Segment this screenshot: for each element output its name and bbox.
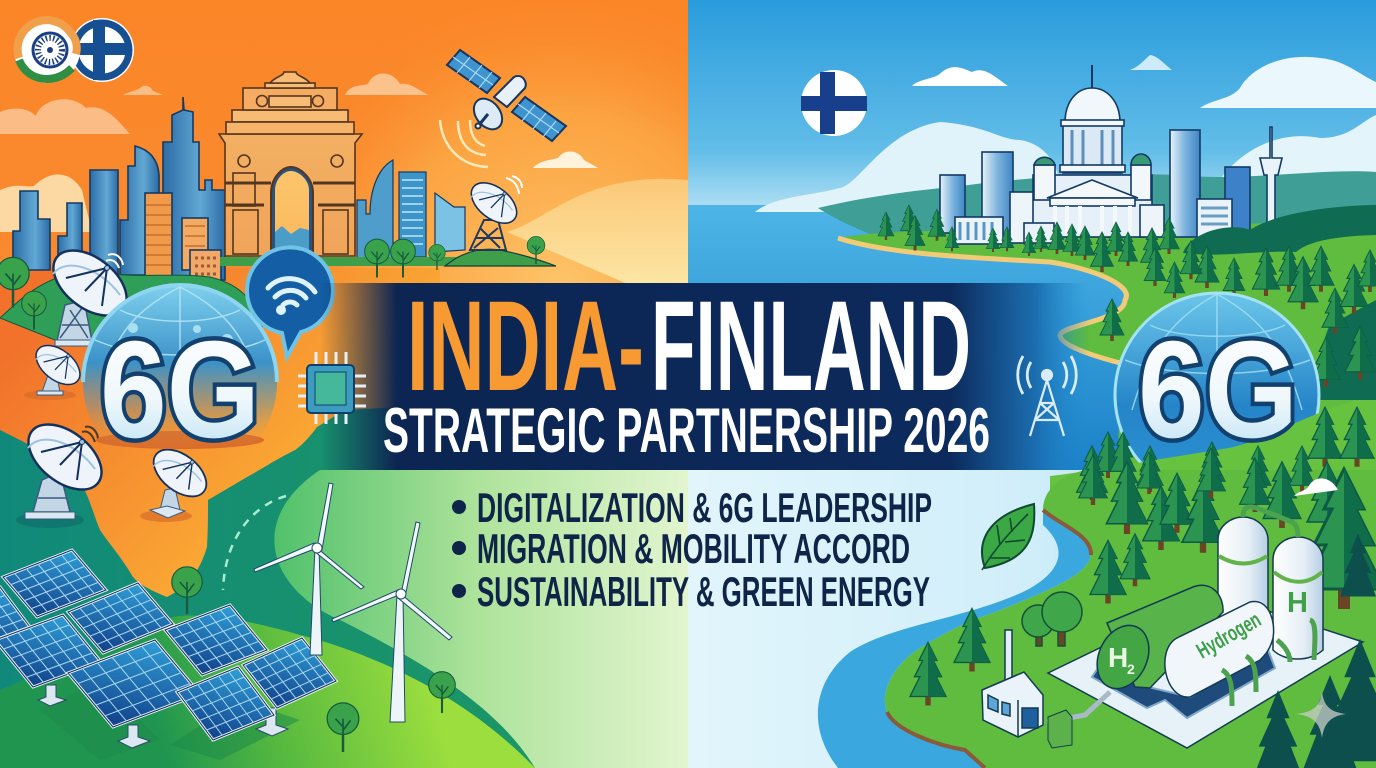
trees: India left round trees bbox=[0, 257, 46, 330]
icon: satellite dishes on map bbox=[16, 237, 215, 528]
bullet list: partnership pillars: DIGITALIZATION & 6G LEADERSHIP bbox=[477, 484, 932, 531]
west coast dish bbox=[33, 472, 70, 512]
bullet list: partnership pillars: MIGRATION & MOBILITY ACCORD bbox=[477, 525, 910, 572]
hill: green hill below skyline bbox=[0, 270, 262, 345]
skyline: India city buildings right bbox=[357, 160, 465, 258]
globe: India 6G bbox=[83, 285, 277, 479]
south dish bbox=[160, 488, 180, 510]
logo: India and Finland interlocked rings bbox=[14, 17, 134, 83]
panel: Finland sky and sea background bbox=[688, 0, 1376, 475]
India ring bbox=[14, 17, 80, 83]
label: 6G left: 6G bbox=[100, 313, 260, 467]
icon: microchip bbox=[298, 352, 366, 424]
forest: lower trees bbox=[910, 407, 1376, 706]
panel legs bbox=[38, 685, 288, 748]
icon: signal waves from satellite bbox=[440, 120, 488, 167]
white horizontal tank bbox=[1165, 602, 1274, 697]
vertical tank one bbox=[1218, 517, 1268, 630]
steam cloud bbox=[1294, 478, 1338, 496]
vertical tank two bbox=[1273, 537, 1323, 659]
shoreline: sand strip bbox=[838, 238, 1126, 363]
icon: green leaf bbox=[982, 504, 1034, 570]
white horizontal tank: Hydrogen bbox=[1192, 607, 1265, 663]
skyline: India city buildings left bbox=[13, 97, 225, 283]
small dish bbox=[42, 372, 60, 392]
platform bbox=[1048, 593, 1363, 748]
land: Finland southern forest bbox=[885, 470, 1376, 768]
icon: Wi-Fi speech bubble bbox=[247, 247, 333, 357]
banner: central title band bbox=[320, 283, 1090, 470]
connecting pipe bbox=[1243, 507, 1298, 537]
Finland ring bbox=[70, 18, 134, 82]
bullet list: partnership pillars bbox=[452, 484, 932, 615]
land: lower east meadow bbox=[1050, 400, 1376, 500]
base under tanks bbox=[1092, 650, 1275, 718]
icon: antenna tower with signal bbox=[1018, 356, 1076, 436]
panel: Finland pale lower background bbox=[688, 470, 1376, 768]
panel: India green lower background bbox=[0, 400, 688, 768]
label: 6G right: 6G bbox=[1138, 313, 1298, 467]
clouds: Finland sky bbox=[755, 55, 1376, 212]
globe: Finland dome behind 6G bbox=[1115, 293, 1319, 497]
river bank bbox=[887, 510, 1091, 768]
dish shadows bbox=[16, 390, 192, 528]
bullet list: partnership pillars: SUSTAINABILITY & GREEN ENERGY bbox=[477, 568, 930, 615]
forest: northern shore trees bbox=[878, 205, 1376, 386]
panel: India sky background bbox=[0, 0, 688, 300]
landmark: Helsinki skyline bbox=[940, 65, 1282, 244]
small green box bbox=[1048, 710, 1072, 748]
illustration: solar panel field bbox=[0, 550, 336, 760]
path: dashed route bbox=[223, 496, 286, 590]
landmark: India Gate bbox=[219, 72, 362, 256]
icon: wind turbine left bbox=[254, 483, 364, 655]
river: bright bend bbox=[818, 510, 1091, 768]
illustration: hydrogen plant bbox=[982, 478, 1363, 748]
green horizontal tank bbox=[1087, 585, 1223, 697]
icon: sparkle watermark bbox=[1296, 692, 1346, 738]
icon: Finland flag badge bbox=[801, 70, 867, 136]
title: India-Finland: INDIA- bbox=[407, 275, 644, 418]
small factory bbox=[982, 630, 1043, 737]
title: India-Finland bbox=[407, 275, 971, 418]
subtitle: Strategic Partnership 2026: STRATEGIC PARTNERSHIP 2026 bbox=[383, 396, 990, 466]
icon: hilltop radar dish bbox=[464, 175, 524, 250]
trees: dark foreground pines bbox=[1252, 639, 1376, 768]
land: Finland northern shore bbox=[838, 222, 1376, 470]
forest backdrop: dark tree belts bbox=[1183, 205, 1376, 400]
pipes bbox=[1222, 620, 1315, 706]
trees: leafy cluster bbox=[1022, 592, 1082, 646]
trees: lower India bbox=[172, 567, 455, 752]
green horizontal tank: 2 bbox=[1127, 661, 1135, 677]
large dish tower bbox=[57, 300, 92, 341]
ground: green strip under landmarks bbox=[220, 249, 556, 266]
icon: satellite bbox=[447, 50, 566, 141]
title: India-Finland: FINLAND bbox=[651, 275, 971, 418]
green horizontal tank: H bbox=[1108, 642, 1128, 673]
icon: wind turbine right bbox=[332, 522, 452, 722]
vertical tank two: H bbox=[1287, 587, 1308, 619]
hills: Finland distant teal bbox=[818, 171, 1376, 245]
map: India orange landmass bbox=[0, 268, 440, 597]
clouds: India sky bbox=[0, 74, 598, 232]
trees: India hilltop round trees bbox=[365, 236, 545, 278]
panel shadows bbox=[40, 680, 300, 760]
